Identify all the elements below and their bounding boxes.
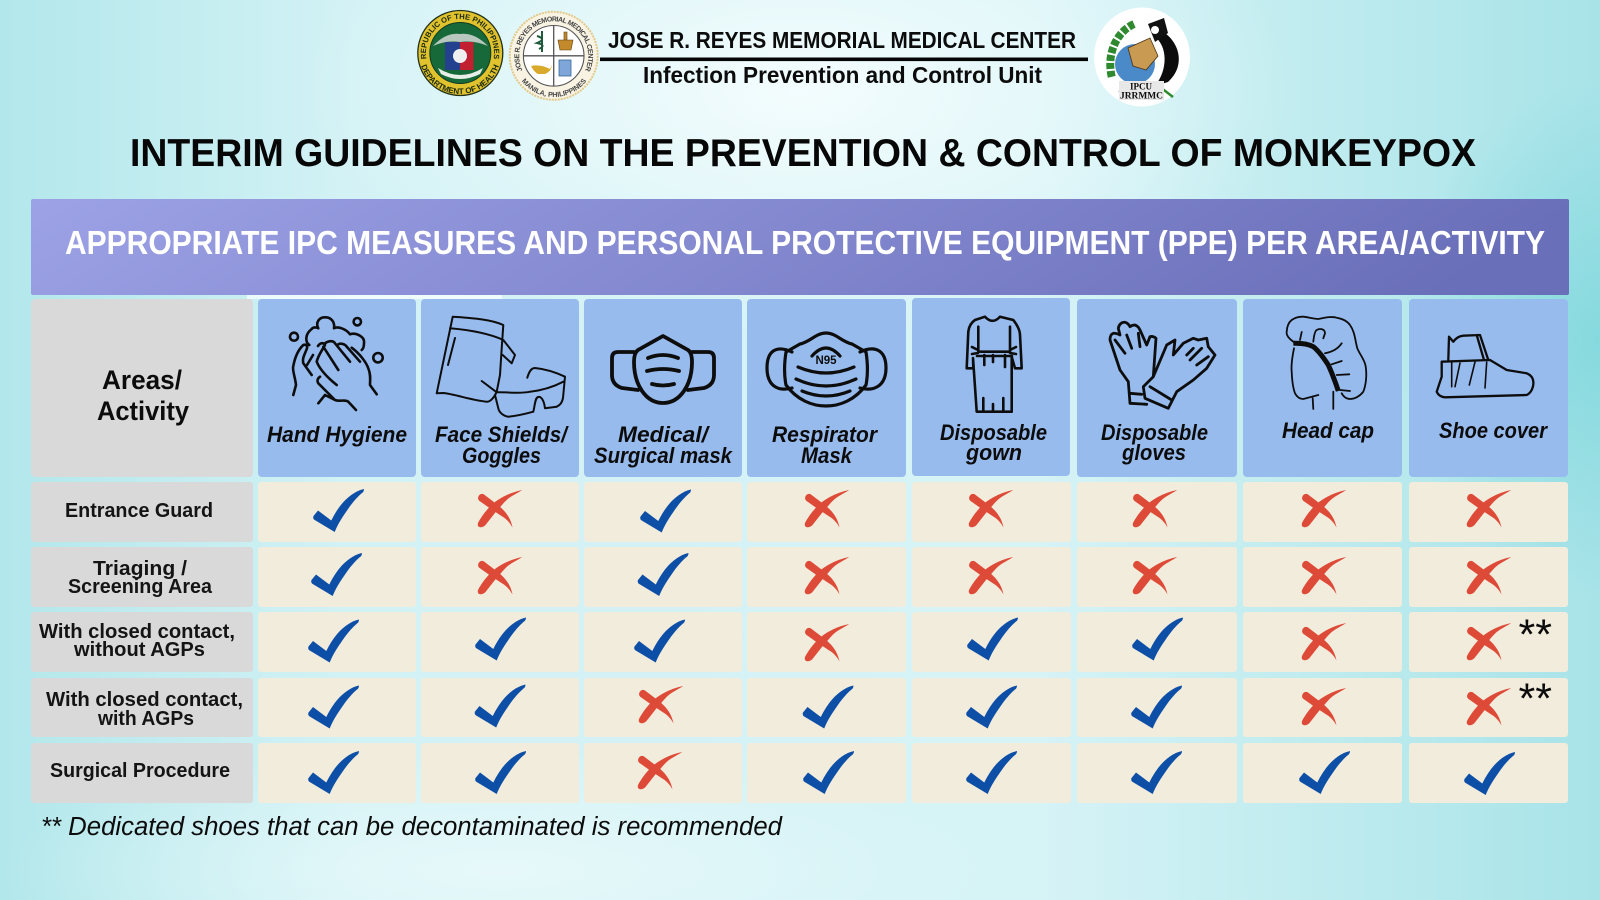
cross: head cap xyxy=(1302,557,1346,594)
check: hand hygiene xyxy=(311,553,362,596)
header: hospital name: JOSE R. REYES MEMORIAL MEDICAL CENTER xyxy=(608,27,1076,53)
row label: With closed contact, xyxy=(39,621,235,643)
check: gown xyxy=(966,686,1017,728)
header cell: respirator mask: Respirator xyxy=(772,422,878,447)
header rule xyxy=(600,58,1088,61)
header cell: respirator mask: Mask xyxy=(801,443,854,468)
check: surgical mask xyxy=(638,553,688,596)
footnote marker: ** xyxy=(1518,611,1552,659)
cross: face shields xyxy=(478,490,522,528)
header cell: hand hygiene xyxy=(258,299,416,477)
cross: gloves xyxy=(1133,557,1177,594)
check: hand hygiene xyxy=(308,751,359,794)
cross: shoe cover xyxy=(1467,490,1511,528)
check: face shields xyxy=(475,751,526,794)
header cell: head cap: Head cap xyxy=(1282,418,1374,443)
row: With closed contact, with AGPs xyxy=(31,675,1568,737)
cross: gown xyxy=(969,557,1013,594)
logo: Department of Health seal: REPUBLIC OF THE PHILIPPINES xyxy=(420,14,500,59)
header: unit name: Infection Prevention and Control Unit xyxy=(643,62,1042,88)
check: shoe cover xyxy=(1464,752,1515,795)
header cell: disposable gown: Disposable xyxy=(940,420,1047,445)
header cell: face shields and goggles: Goggles xyxy=(462,443,541,468)
check: gloves xyxy=(1131,751,1182,794)
row: Entrance Guard xyxy=(31,482,1568,542)
row label: without AGPs xyxy=(73,639,205,661)
cross: surgical mask xyxy=(639,686,683,724)
header cell: medical / surgical mask: Medical/ xyxy=(618,422,711,447)
header cell: disposable gown xyxy=(912,298,1070,476)
logo: JRRMMC seal: MANILA, PHILIPPINES xyxy=(522,78,586,97)
cross: shoe cover xyxy=(1467,623,1511,660)
logo: IPCU seal: IPCU xyxy=(1130,82,1152,92)
check: respirator xyxy=(803,686,854,728)
header cell: respirator mask: N95 xyxy=(815,355,837,367)
header cell: face shields and goggles xyxy=(421,299,579,477)
row label: with AGPs xyxy=(97,708,194,730)
row: With closed contact, without AGPs xyxy=(31,611,1568,672)
cross: respirator xyxy=(805,490,849,528)
cross: gloves xyxy=(1133,490,1177,528)
check: head cap xyxy=(1299,751,1350,794)
check: face shields xyxy=(475,618,526,660)
cross: gown xyxy=(969,490,1013,528)
row label xyxy=(46,689,243,730)
cross: surgical mask xyxy=(638,752,682,790)
header cell: disposable gloves: Disposable xyxy=(1101,420,1208,445)
cross: shoe cover xyxy=(1467,557,1511,594)
check: surgical mask xyxy=(634,620,685,662)
check: hand hygiene xyxy=(308,686,359,728)
check: gown xyxy=(967,618,1018,660)
cross: shoe cover xyxy=(1467,688,1511,726)
check: face shields xyxy=(475,684,526,728)
row label: Surgical Procedure xyxy=(50,760,230,782)
panel: table header row xyxy=(31,298,1568,477)
row label: With closed contact, xyxy=(46,689,243,711)
header cell: respirator mask xyxy=(747,299,906,477)
logo: JRRMMC seal xyxy=(508,10,599,101)
banner: section heading xyxy=(31,199,1569,295)
cross: head cap xyxy=(1302,688,1346,726)
footnote marker: ** xyxy=(1518,675,1552,723)
footnote: ** Dedicated shoes that can be decontaminated is recommended xyxy=(41,813,783,841)
logo: Department of Health seal xyxy=(417,10,504,96)
header cell: shoe cover: Shoe cover xyxy=(1439,418,1548,443)
check: surgical mask xyxy=(640,490,691,532)
row label xyxy=(39,621,235,661)
title: INTERIM GUIDELINES ON THE PREVENTION & CONTROL OF MONKEYPOX xyxy=(130,132,1476,175)
row: Triaging / Screening Area xyxy=(31,547,1568,607)
cross: head cap xyxy=(1302,490,1346,528)
cross: respirator xyxy=(805,624,849,662)
check: gloves xyxy=(1131,686,1182,728)
cross: respirator xyxy=(805,557,849,594)
logo: Department of Health seal: DEPARTMENT OF HEALTH xyxy=(421,64,499,94)
header cell: head cap xyxy=(1243,299,1402,477)
header cell: areas / activity: Areas/ xyxy=(102,365,182,395)
header cell: medical / surgical mask: Surgical mask xyxy=(594,443,734,468)
header cell: areas / activity xyxy=(31,299,253,477)
header cell: hand hygiene: Hand Hygiene xyxy=(267,422,407,447)
header cell: medical / surgical mask xyxy=(584,299,742,477)
check: gloves xyxy=(1132,618,1183,660)
header cell: face shields and goggles: Face Shields/ xyxy=(435,422,570,447)
header cell: disposable gown: gown xyxy=(965,440,1022,465)
row label: Screening Area xyxy=(68,576,213,598)
header cell: areas / activity: Activity xyxy=(97,396,189,426)
check: hand hygiene xyxy=(308,620,359,662)
row label: Entrance Guard xyxy=(65,500,213,522)
header cell: shoe cover xyxy=(1409,299,1568,477)
row label xyxy=(68,558,213,598)
header cell: disposable gloves: gloves xyxy=(1121,440,1186,465)
check: gown xyxy=(966,751,1017,794)
row label: Triaging / xyxy=(93,558,187,580)
header cell: disposable gloves xyxy=(1077,299,1237,477)
cross: head cap xyxy=(1302,623,1346,660)
logo: JRRMMC seal: JOSE R. REYES MEMORIAL MEDICAL CENTER xyxy=(514,16,594,72)
check: respirator xyxy=(803,751,854,794)
check: hand hygiene xyxy=(313,489,364,532)
cross: face shields xyxy=(478,557,522,594)
logo: IPCU seal xyxy=(1094,8,1190,106)
logo: IPCU seal: JRRMMC xyxy=(1120,90,1163,100)
row: Surgical Procedure xyxy=(31,743,1568,803)
